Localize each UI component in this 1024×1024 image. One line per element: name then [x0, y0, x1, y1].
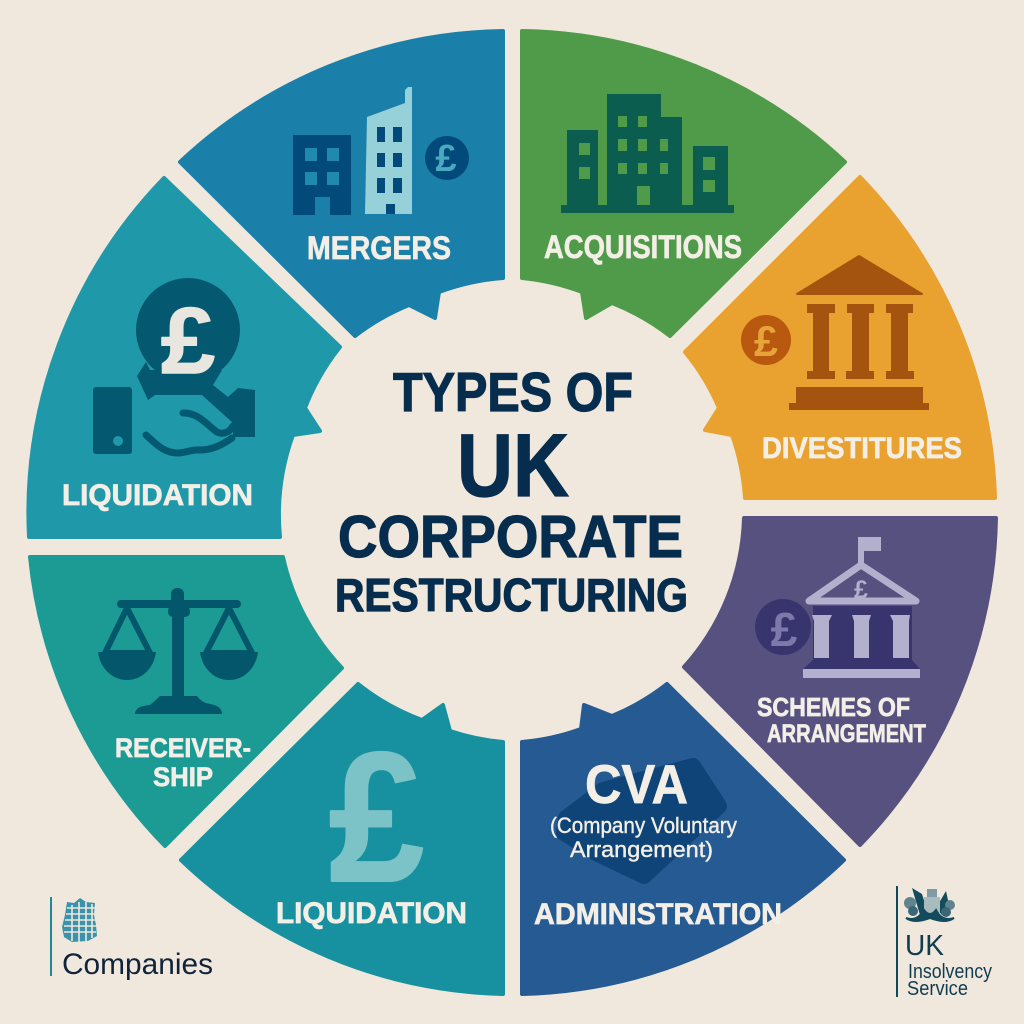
label: acquisitions: ACQUISITIONS — [544, 229, 742, 265]
title: CORPORATE — [338, 504, 683, 570]
icon: institution with flag and pound: £ — [854, 576, 868, 604]
icon: pound bubble and handshake — [93, 278, 255, 454]
title: RESTRUCTURING — [335, 569, 688, 621]
icon: merging buildings — [293, 87, 469, 215]
label: receivership: RECEIVER- — [115, 733, 251, 763]
icon: bank with pound coin: £ — [754, 318, 778, 366]
icon: large pound sign: £ — [329, 715, 424, 921]
label: CVA: CVA — [585, 753, 688, 815]
label: administration: ADMINISTRATION — [534, 898, 782, 931]
text: UK: UK — [905, 930, 945, 962]
title — [335, 361, 688, 621]
label: receivership — [115, 733, 251, 792]
panel: divestitures — [685, 177, 995, 498]
icon: pound bubble and handshake: £ — [161, 288, 215, 393]
title: UK — [457, 415, 569, 515]
text: Companies: Companies — [62, 948, 213, 981]
icon: dark blob behind CVA — [564, 766, 719, 876]
panel: mergers — [180, 31, 503, 336]
label: schemes of arrangement — [757, 692, 926, 748]
panel: liquidation left — [28, 178, 340, 537]
label: company voluntary arrangement: Arrangement) — [570, 837, 713, 862]
icon: institution with flag and pound — [755, 537, 920, 678]
label: mergers: MERGERS — [307, 230, 451, 266]
panel: CVA and administration — [522, 684, 844, 994]
icon: institution with flag and pound: £ — [771, 604, 798, 657]
label: receivership: SHIP — [153, 762, 213, 792]
icon: royal crest — [904, 888, 955, 921]
panel: receivership — [30, 557, 342, 846]
icon: scales of justice — [98, 588, 258, 714]
text: Insolvency Service — [907, 961, 992, 1000]
icon: globe ship emblem — [62, 898, 97, 942]
logo: Companies — [50, 897, 213, 981]
label: schemes of arrangement: ARRANGEMENT — [767, 720, 926, 748]
title: TYPES OF — [393, 361, 633, 423]
label: schemes of arrangement: SCHEMES OF — [757, 692, 910, 722]
icon: office buildings — [561, 94, 734, 213]
label: company voluntary arrangement: (Company Voluntary — [550, 813, 737, 838]
icon: merging buildings: £ — [435, 138, 457, 180]
text: Insolvency Service: Insolvency — [908, 961, 992, 983]
panel: liquidation bottom — [181, 684, 503, 994]
label: liquidation: LIQUIDATION — [276, 897, 467, 930]
icon: bank with pound coin — [741, 256, 929, 410]
logo: UK Insolvency Service — [896, 886, 992, 1000]
label: company voluntary arrangement — [550, 813, 737, 862]
label: divestitures: DIVESTITURES — [762, 432, 962, 465]
label: liquidation: LIQUIDATION — [62, 479, 253, 512]
text: Insolvency Service: Service — [907, 978, 968, 1000]
panel: acquisitions — [522, 31, 845, 336]
panel: schemes of arrangement — [684, 518, 996, 845]
